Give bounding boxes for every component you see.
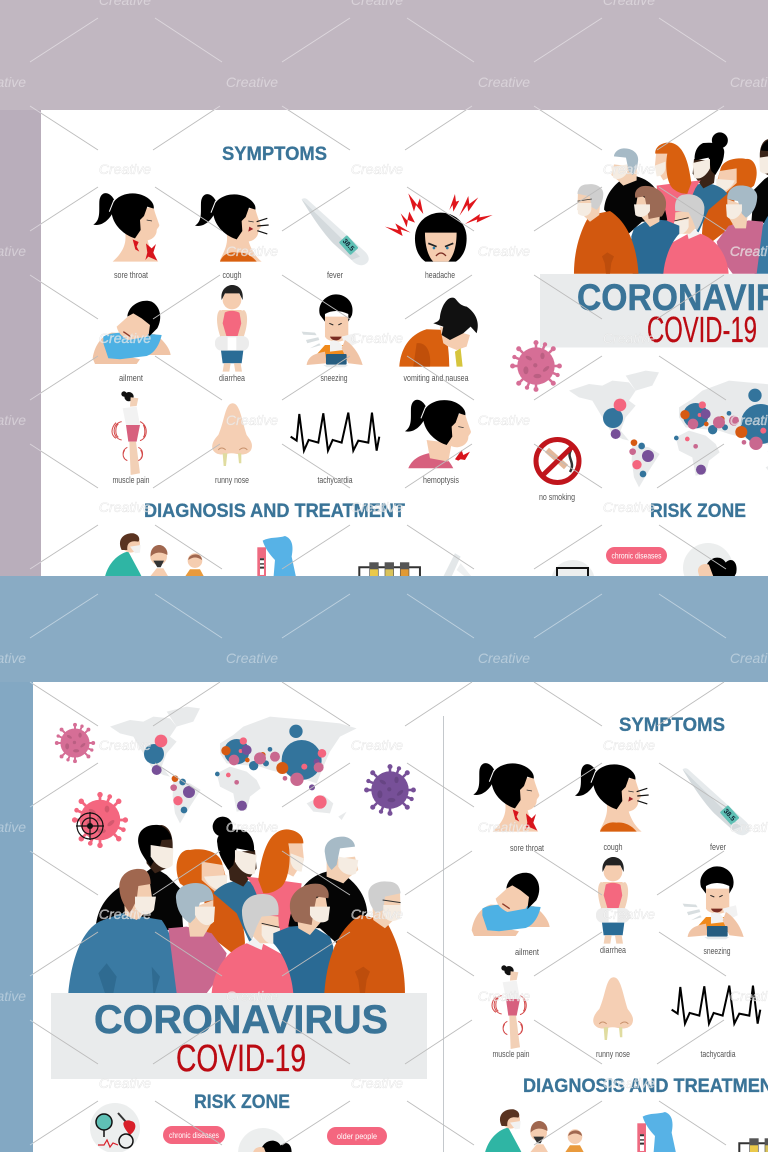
icon: headache: [385, 193, 493, 262]
pill: older people: [327, 1127, 387, 1145]
icon: sneezing: [302, 294, 363, 367]
pill: chronic diseases: chronic diseases: [169, 1130, 219, 1140]
world map (bottom): [110, 707, 357, 823]
icon: sore throat: [473, 763, 539, 832]
icon: diarrhea: [596, 857, 630, 944]
icon: ailment: [472, 873, 550, 936]
bottom panel white sheet: [33, 682, 768, 1152]
label: fever: fever: [710, 842, 726, 852]
label: headache: headache: [425, 270, 455, 280]
label: vomiting and nausea: vomiting and nausea: [404, 373, 468, 383]
icon: runny nose: [212, 403, 252, 466]
panel: symptoms (bottom): [472, 763, 760, 1059]
top panel white sheet: [41, 110, 768, 576]
label: sneezing: sneezing: [704, 946, 730, 956]
label: sore throat: sore throat: [114, 270, 148, 280]
label: ailment: ailment: [119, 373, 143, 383]
label: muscle pain: muscle pain: [112, 475, 150, 485]
icon: fever thermometer: [302, 198, 369, 265]
icon: risk circle with girl (top): [683, 543, 737, 593]
pill: chronic diseases (top): [606, 547, 667, 564]
icon: vomiting: [399, 298, 478, 367]
heading: symptoms (bottom): SYMPTOMS: [619, 714, 725, 736]
icon: diarrhea: [215, 285, 249, 372]
icon: virus (top): [510, 340, 562, 392]
icon: ailment: [93, 301, 171, 364]
world map (top): [569, 371, 768, 487]
crowd (top, mirrored): [574, 132, 768, 274]
pill: chronic diseases: [163, 1126, 225, 1144]
heading: risk zone (bottom): RISK ZONE: [194, 1091, 290, 1113]
icon: risk circle with monitor (top): [551, 560, 595, 604]
label: sore throat: sore throat: [510, 843, 544, 853]
label: tachycardia: tachycardia: [318, 475, 352, 485]
icons: diagnosis row (bottom): [485, 1109, 768, 1152]
label: tachycardia: tachycardia: [700, 1049, 736, 1059]
label: hemoptysis: hemoptysis: [423, 475, 459, 485]
label: diarrhea: diarrhea: [219, 373, 245, 383]
icon: chronic disease circle: [90, 1103, 140, 1152]
title: coronavirus (bottom): CORONAVIRUS: [94, 998, 388, 1042]
label: no smoking: no smoking: [539, 492, 575, 502]
icon: cough: [575, 764, 649, 832]
icons: diagnosis row (top): [105, 533, 472, 581]
title banner (bottom): [51, 993, 427, 1079]
icon: virus purple: [364, 764, 416, 816]
title banner (top): [540, 274, 768, 348]
top panel background: [0, 0, 768, 576]
icon: fever thermometer: [683, 768, 750, 835]
label: runny nose: runny nose: [596, 1049, 630, 1059]
heading: risk zone (top): RISK ZONE: [650, 500, 746, 522]
label: diarrhea: diarrhea: [600, 945, 626, 955]
subtitle: covid-19 (bottom): COVID-19: [176, 1038, 306, 1080]
label: sneezing: sneezing: [320, 373, 348, 383]
icon: muscle pain: [492, 965, 526, 1049]
panel: symptoms (top): [93, 193, 493, 485]
icon: sore throat: [93, 193, 159, 262]
pill: chronic diseases (top): chronic diseases: [612, 550, 662, 560]
label: muscle pain: muscle pain: [492, 1049, 530, 1059]
top panel left strip: [0, 110, 41, 576]
heading: symptoms (top): SYMPTOMS: [222, 143, 327, 165]
icon: hemoptysis: [405, 400, 471, 468]
label: fever: fever: [327, 270, 343, 280]
bottom panel left strip: [0, 682, 33, 1152]
label: ailment: ailment: [515, 947, 539, 957]
icon: no smoking: [536, 440, 579, 482]
pill: older people: older people: [337, 1131, 377, 1141]
icon: muscle pain: [112, 391, 146, 475]
label: cough: cough: [604, 842, 622, 852]
label: runny nose: runny nose: [215, 475, 249, 485]
label: cough: cough: [222, 270, 242, 280]
icon: tachycardia ecg: [672, 986, 760, 1024]
icon: sneezing: [683, 866, 744, 939]
icon: tachycardia ecg: [291, 413, 379, 451]
vertical divider: [443, 716, 444, 1152]
icon: virus pink with target: [72, 792, 128, 848]
icon: girl circle: [238, 1128, 292, 1152]
icon: cough: [195, 194, 269, 262]
bottom panel background: [0, 576, 768, 1152]
icon: virus mauve: [55, 723, 95, 763]
heading: diagnosis and treatment (top): DIAGNOSIS AND TREATMENT: [144, 500, 405, 522]
icon: runny nose: [593, 977, 633, 1040]
crowd (bottom): [68, 817, 405, 993]
